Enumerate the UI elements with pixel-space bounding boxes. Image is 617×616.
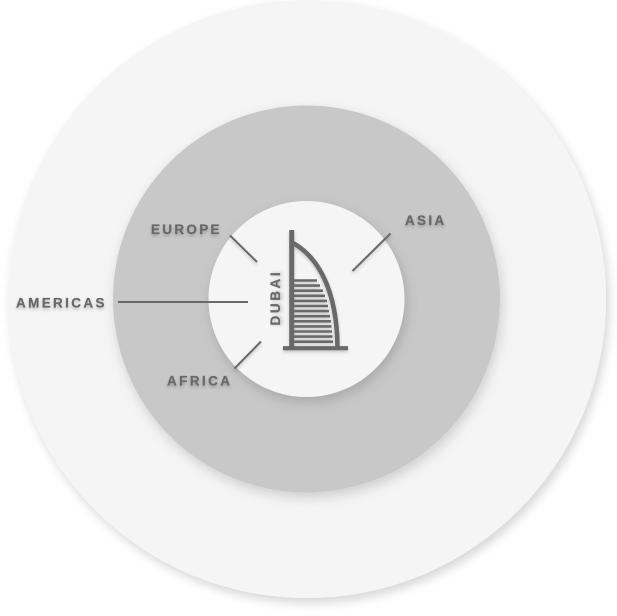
inner circle	[208, 201, 404, 397]
label: Europe: EUROPE	[151, 222, 222, 237]
middle circle	[113, 106, 500, 492]
line: Africa connector	[234, 342, 261, 368]
line: Asia connector	[352, 234, 390, 271]
line: Europe connector	[230, 236, 257, 262]
icon: Burj Al Arab building	[283, 230, 348, 348]
label: Dubai: DUBAI	[268, 270, 283, 326]
line: Americas connector	[118, 301, 248, 303]
label: Americas: AMERICAS	[16, 296, 107, 310]
label: Asia: ASIA	[405, 213, 446, 228]
label: Africa: AFRICA	[167, 374, 232, 388]
